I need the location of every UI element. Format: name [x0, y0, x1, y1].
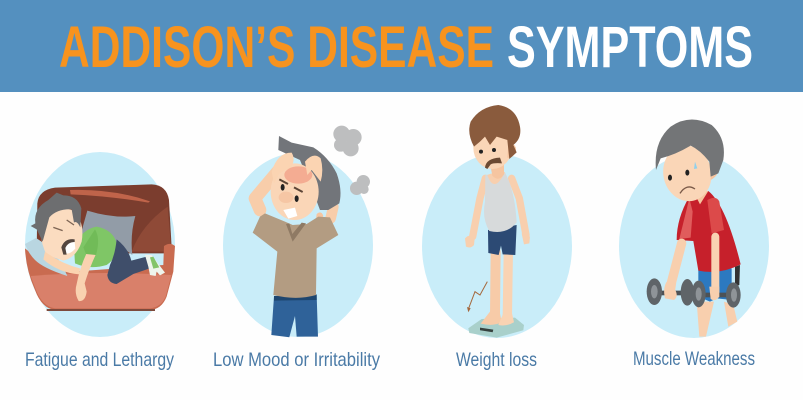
label: low mood or irritability: Low Mood or Irritability: [213, 349, 380, 371]
illustration: man lying on sofa: [25, 184, 175, 311]
illustration: weak man lifting dumbbells: [647, 120, 741, 337]
panel: weight loss: [422, 105, 572, 371]
illustration: irritated man holding head: [253, 126, 370, 337]
label: muscle weakness: Muscle Weakness: [633, 348, 755, 370]
panel: muscle weakness: [619, 120, 769, 370]
panel: fatigue and lethargy: [25, 152, 175, 371]
dumbbells: [647, 278, 741, 308]
illustration: thin man on scale: [465, 105, 530, 338]
header banner: [0, 0, 803, 92]
title: ADDISON’S DISEASE: [59, 15, 494, 80]
arrow: weight going down: [469, 282, 487, 308]
label: fatigue and lethargy: Fatigue and Lethargy: [25, 349, 174, 371]
label: weight loss: Weight loss: [456, 349, 537, 371]
panel: low mood or irritability: [213, 126, 380, 371]
smoke clouds: [333, 126, 370, 195]
